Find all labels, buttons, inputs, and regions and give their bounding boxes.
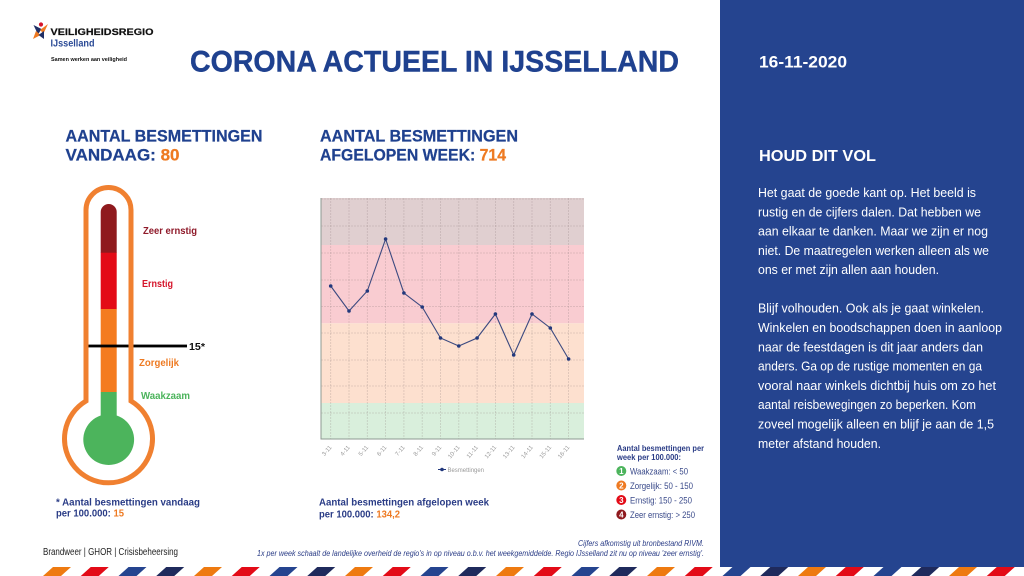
- marker value: 15*: [189, 341, 206, 353]
- x-axis labels: 7-11: [395, 444, 407, 458]
- chart footnote: Aantal besmettingen afgelopen week: [319, 496, 489, 508]
- thermometer fill: waakzaam: [83, 392, 134, 465]
- band: zorgelijk: [321, 323, 584, 403]
- title: CORONA ACTUEEL IN IJSSELLAND: [190, 46, 679, 78]
- label: zeer ernstig: Zeer ernstig: [143, 225, 197, 237]
- line chart: [321, 198, 584, 474]
- legend item: zeer ernstig: [616, 510, 695, 520]
- logo tagline: Samen werken aan veiligheid: [51, 57, 127, 63]
- paragraph 1: Het gaat de goede kant op. Het beeld is: [758, 185, 976, 200]
- band: ernstig: [321, 245, 584, 323]
- paragraph 2: vooral naar winkels dichtbij huis om zo het: [758, 378, 996, 393]
- marker line at 15: [88, 345, 187, 347]
- logo name: VEILIGHEIDSREGIO: [50, 27, 154, 38]
- x-axis labels: 13-11: [502, 444, 517, 460]
- paragraph 2: [758, 301, 1002, 451]
- band: waakzaam: [321, 403, 584, 439]
- panel: houd dit vol: [720, 0, 1024, 567]
- paragraph 1: aan elkaar te danken. Maar we zijn er nog: [758, 224, 988, 239]
- chart footnote: [319, 496, 489, 520]
- paragraph 2: aantal reisbewegingen zo beperken. Kom: [758, 397, 976, 412]
- thermometer fill: zorgelijk: [101, 309, 117, 392]
- data points: [329, 237, 570, 361]
- legend heading: [616, 443, 705, 462]
- paragraph 2: naar de feestdagen is dit jaar anders dan: [758, 339, 983, 354]
- source note: [257, 539, 704, 558]
- paragraph 2: meter afstand houden.: [758, 436, 881, 451]
- thermometer fill: ernstig: [101, 253, 117, 309]
- x-axis labels: 10-11: [447, 444, 462, 460]
- risk level legend: [616, 443, 705, 520]
- x-axis labels: 4-11: [340, 444, 352, 458]
- source note: 1x per week schaalt de landelijke overheid de regio's in op niveau o.b.v. het weekgemiddelde. Regio IJsselland zit nu op niveau 'zeer ernstig'.: [257, 549, 704, 558]
- legend item: zorgelijk: Zorgelijk: 50 - 150: [630, 481, 693, 491]
- band: zeer ernstig: [321, 198, 584, 245]
- source note: Cijfers afkomstig uit bronbestand RIVM.: [578, 539, 704, 548]
- x-axis labels: 9-11: [431, 444, 444, 458]
- legend heading: Aantal besmettingen per: [617, 443, 705, 453]
- chart legend: Besmettingen: [448, 467, 484, 474]
- thermometer outline: [64, 188, 152, 483]
- logo: Veiligheidsregio IJsselland: [33, 22, 154, 63]
- data line: [331, 239, 569, 359]
- legend item: waakzaam: [616, 466, 688, 476]
- icon: logo star: [33, 22, 48, 39]
- heading: besmettingen afgelopen week: AANTAL BESMETTINGEN: [320, 127, 518, 146]
- paragraph 1: ons er met zijn allen aan houden.: [758, 262, 939, 277]
- x-axis labels: 6-11: [376, 444, 389, 458]
- heading: besmettingen vandaag: VANDAAG: 80: [66, 146, 180, 165]
- label: ernstig: Ernstig: [142, 278, 173, 290]
- paragraph 2: zoveel mogelijk alleen en blijf je aan de 1,5: [758, 416, 994, 432]
- legend item: ernstig: Ernstig: 150 - 250: [630, 496, 692, 506]
- paragraph 1: [758, 185, 989, 277]
- x-axis labels: 16-11: [557, 444, 572, 460]
- paragraph 1: niet. De maatregelen werken alleen als we: [758, 243, 989, 258]
- legend item: zeer ernstig: Zeer ernstig: > 250: [630, 510, 695, 520]
- thermometer footnote: [56, 496, 200, 520]
- x-axis labels: 12-11: [484, 444, 499, 460]
- thermometer footnote: per 100.000: 15: [56, 508, 124, 520]
- x-axis labels: 3-11: [321, 444, 334, 458]
- airmail stripe border: [43, 567, 1015, 576]
- label: zorgelijk: Zorgelijk: [139, 357, 179, 369]
- chart footnote: per 100.000: 134,2: [319, 508, 400, 520]
- panel heading: HOUD DIT VOL: [759, 148, 876, 165]
- thermometer fill: zeer ernstig: [101, 204, 117, 253]
- paragraph 2: Winkelen en boodschappen doen in aanloop: [758, 320, 1002, 335]
- x-axis labels: 8-11: [413, 444, 425, 458]
- heading: besmettingen afgelopen week: AFGELOPEN WEEK: 714: [320, 146, 506, 165]
- paragraph 2: anders. Ga op de rustige momenten en ga: [758, 359, 983, 374]
- paragraph 1: rustig en de cijfers dalen. Dat hebben we: [758, 204, 981, 219]
- x-axis labels: 15-11: [539, 444, 554, 460]
- heading: besmettingen vandaag: [66, 127, 262, 165]
- legend item: zeer ernstig: 4: [619, 510, 624, 520]
- x-axis labels: 14-11: [521, 444, 535, 460]
- legend heading: week per 100.000:: [616, 452, 681, 462]
- legend item: waakzaam: Waakzaam: < 50: [630, 466, 688, 476]
- footer organisations: Brandweer | GHOR | Crisisbeheersing: [43, 547, 178, 558]
- heading: besmettingen afgelopen week: [320, 127, 518, 165]
- label: waakzaam: Waakzaam: [141, 390, 190, 402]
- logo region: IJsselland: [50, 38, 94, 50]
- x-axis labels: 5-11: [358, 444, 371, 458]
- thermometer: [64, 188, 206, 483]
- legend item: zorgelijk: 2: [619, 482, 624, 490]
- x-axis labels: 11-11: [466, 444, 480, 460]
- heading: besmettingen vandaag: AANTAL BESMETTINGEN: [66, 127, 262, 146]
- legend item: ernstig: 3: [619, 496, 624, 505]
- legend item: waakzaam: 1: [619, 467, 624, 476]
- paragraph 2: Blijf volhouden. Ook als je gaat winkelen.: [758, 301, 984, 316]
- x-axis labels: [321, 444, 572, 460]
- date: 16-11-2020: [759, 54, 847, 72]
- panel background: [720, 0, 1024, 567]
- thermometer footnote: * Aantal besmettingen vandaag: [56, 496, 200, 508]
